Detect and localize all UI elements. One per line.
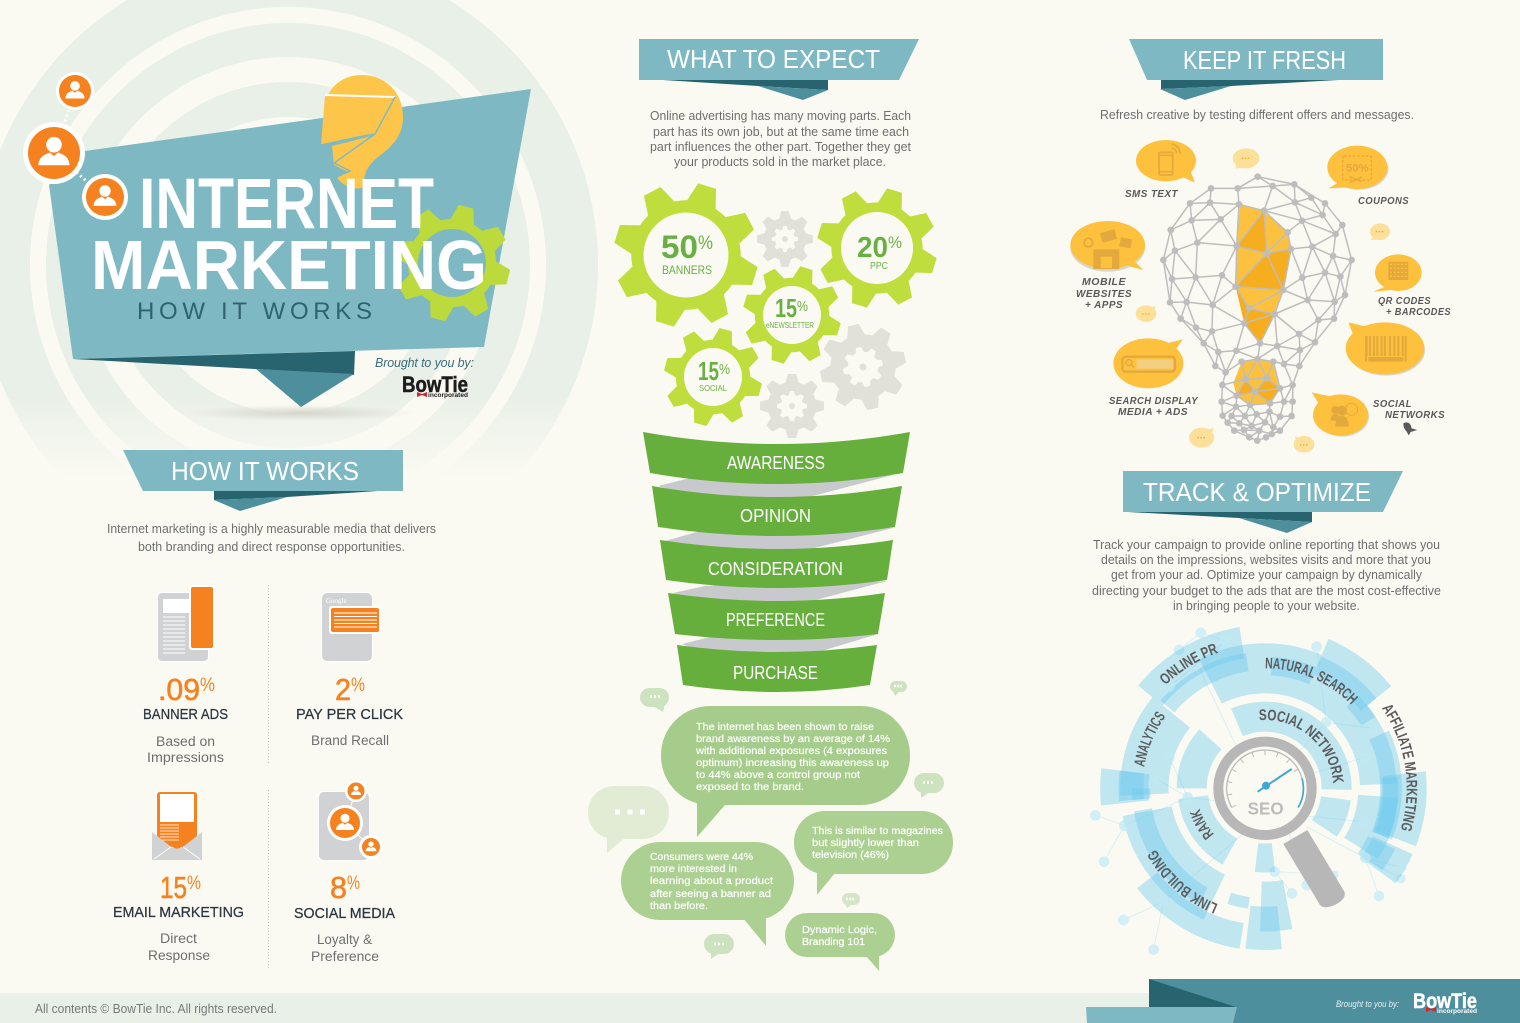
heading: keep it fresh: [1129, 39, 1383, 100]
stat: banner ads: %: [200, 675, 215, 696]
sponsor credit: BowTie: [402, 372, 468, 397]
stat: pay per click: Brand Recall: [311, 733, 389, 748]
gear: 20% ppc: PPC: [870, 261, 888, 272]
bubble: brand awareness: to 44% above a control group not: [696, 770, 860, 781]
bubble: brand awareness: optimum) increasing this awareness up: [696, 758, 889, 769]
keep it fresh labels: MEDIA + ADS: [1118, 406, 1188, 418]
bubble: source: Dynamic Logic,: [802, 925, 877, 936]
intro text: details on the impressions, websites visits and more that you: [1101, 553, 1431, 567]
funnel stage: opinion: [652, 486, 902, 536]
radial segments: [1058, 581, 1472, 996]
sponsor ribbon: [1086, 979, 1520, 1023]
background concentric rings: [0, 0, 620, 590]
seo radial diagram: [1090, 627, 1427, 955]
gear: 15% social: %: [719, 362, 730, 378]
icon: green gear: [382, 193, 522, 333]
footer: [0, 979, 1520, 1023]
bubble: brand awareness: brand awareness by an average of 14%: [696, 734, 890, 745]
funnel stage: opinion: OPINION: [740, 506, 811, 526]
heading: what to expect: [639, 39, 919, 100]
bubble: brand awareness: with additional exposures (4 exposures: [695, 746, 887, 757]
gear: 15% enewsletter: eNEWSLETTER: [766, 320, 814, 330]
bubble: search display: [1113, 338, 1183, 388]
segment labels: SOCIAL NETWORK: [1259, 709, 1344, 784]
bubble: consumers: [621, 842, 794, 946]
stat: social media: Loyalty &: [317, 932, 372, 947]
gear: 50% banners: 50: [661, 229, 698, 265]
intro text: get from your ad. Optimize your campaign by dynamically: [1111, 568, 1423, 582]
intro text: [650, 109, 912, 169]
bubble: social networks: [1312, 392, 1369, 437]
copyright: All contents © BowTie Inc. All rights reserved.: [35, 1001, 277, 1016]
funnel stage: awareness: AWARENESS: [727, 453, 825, 473]
heading: track and optimize: TRACK & OPTIMIZE: [1143, 477, 1371, 507]
segment labels: RANK: [1190, 808, 1214, 840]
intro text: part influences the other part. Together they get: [650, 140, 912, 154]
heading: keep it fresh: KEEP IT FRESH: [1183, 45, 1346, 75]
funnel stage: purchase: PURCHASE: [733, 663, 818, 683]
mesh nodes: [1163, 177, 1352, 441]
icon: envelope: [152, 791, 202, 860]
bubble: consumers: learning about a product: [650, 876, 773, 887]
stat: banner ads: Based on: [156, 734, 215, 749]
icon: magnifier with seo gauge: SEO: [1248, 798, 1284, 818]
sponsor ribbon: incorporated: [1437, 1009, 1477, 1015]
stat: social media: SOCIAL MEDIA: [294, 905, 395, 922]
panel: what to expect: [588, 39, 953, 971]
bubble: consumers: than before.: [650, 901, 708, 912]
funnel stage: consideration: CONSIDERATION: [708, 559, 843, 579]
stat: email marketing: EMAIL MARKETING: [113, 904, 244, 921]
keep it fresh labels: SEARCH DISPLAY: [1109, 395, 1198, 407]
bubble: brand awareness: exposed to the brand.: [696, 782, 804, 793]
heading: how it works: [123, 450, 403, 511]
bubble: magazines: [794, 811, 953, 895]
keep it fresh labels: [1076, 188, 1451, 421]
bubble: coupons: [1327, 146, 1388, 190]
funnel: [643, 432, 910, 692]
gear: 15% social: [653, 317, 773, 437]
network nodes over segments: [1119, 636, 1406, 907]
keep it fresh labels: SOCIAL: [1373, 398, 1412, 410]
stat: email marketing: %: [187, 873, 201, 894]
funnel stage: purchase: [677, 645, 877, 692]
sponsor credit: Brought to you by:: [375, 356, 474, 370]
title banner: [23, 72, 531, 421]
gear: 15% enewsletter: %: [797, 299, 808, 315]
stat: social media: %: [347, 873, 360, 894]
intro text: Track your campaign to provide online reporting that shows you: [1093, 538, 1440, 552]
stat: email marketing: [113, 791, 244, 963]
title text: INTERNET: [139, 165, 434, 244]
segment labels: ONLINE PR: [1160, 644, 1218, 684]
segment labels: NATURAL SEARCH: [1266, 658, 1358, 704]
segment labels: AFFILIATE MARKETING: [1382, 704, 1418, 831]
bubble: qr codes: [1373, 254, 1422, 292]
stat: banner ads: BANNER ADS: [143, 706, 228, 723]
gear: 15% enewsletter: 15: [775, 293, 797, 323]
intro text: [1092, 538, 1441, 613]
bubble: consumers: Consumers were 44%: [650, 852, 753, 863]
intro text: Internet marketing is a highly measurable media that delivers: [107, 522, 436, 536]
heading: what to expect: WHAT TO EXPECT: [667, 44, 880, 74]
icon: banner ad: [157, 585, 215, 662]
light bulb network: [1070, 140, 1425, 453]
stat: email marketing: Response: [148, 948, 210, 963]
gear: 15% enewsletter: [731, 254, 853, 376]
heading: track and optimize: [1123, 471, 1403, 533]
stat: banner ads: .09: [158, 672, 200, 707]
stat: pay per click: [296, 592, 403, 748]
intro text: in bringing people to your website.: [1173, 599, 1360, 613]
funnel stage: preference: PREFERENCE: [726, 610, 825, 630]
icon: social network: [318, 780, 383, 861]
stat: banner ads: Impressions: [147, 750, 224, 765]
gear: 20% ppc: 20: [857, 232, 888, 264]
keep it fresh labels: SMS TEXT: [1125, 188, 1179, 200]
keep it fresh labels: NETWORKS: [1385, 409, 1445, 421]
speech bubbles: [588, 681, 953, 971]
title text: HOW IT WORKS: [137, 298, 372, 325]
funnel stage: consideration: [660, 540, 893, 588]
stat: social media: 8: [330, 870, 347, 905]
gear: 15% social: SOCIAL: [699, 383, 727, 393]
segment labels: ANALYTICS: [1134, 712, 1165, 767]
title text: MARKETING: [91, 226, 487, 304]
gear: 50% banners: %: [698, 233, 713, 254]
bubble: source: Branding 101: [802, 937, 865, 948]
gear: 20% ppc: %: [888, 233, 902, 252]
gear: 20% ppc: [802, 173, 952, 323]
stat: pay per click: PAY PER CLICK: [296, 706, 403, 723]
stat: pay per click: 2: [335, 672, 351, 707]
bulb filament facets: [1233, 205, 1291, 405]
segment labels: LINK BUILDING: [1148, 850, 1218, 914]
stat: pay per click: %: [351, 675, 365, 696]
bubble: mobile: [1070, 221, 1145, 272]
bubble: brand awareness: [661, 706, 910, 837]
title text: [91, 165, 487, 325]
funnel stage: awareness: [643, 432, 910, 484]
icon: search ad: [321, 592, 381, 662]
intro text: directing your budget to the ads that are the most cost-effective: [1092, 584, 1441, 598]
gear: 50% banners: [596, 165, 776, 345]
stat: banner ads: [143, 585, 228, 765]
icon: bird: [1403, 422, 1417, 435]
intro text: [107, 522, 436, 554]
bubble: magazines: This is similar to magazines: [812, 826, 943, 837]
stat: email marketing: Direct: [160, 931, 197, 946]
panel: how it works: [107, 450, 436, 968]
decorative chat bubbles: [588, 681, 944, 959]
stat: social media: Preference: [311, 949, 379, 964]
intro text: Refresh creative by testing different offers and messages.: [1100, 108, 1414, 122]
keep it fresh labels: + APPS: [1085, 299, 1123, 311]
gear: idle small top: [757, 211, 813, 267]
icon: connected people: [23, 72, 128, 220]
sponsor ribbon: Brought to you by:: [1336, 999, 1399, 1009]
icon: magnifier with seo gauge: [1213, 736, 1345, 907]
bubble: brand awareness: The internet has been shown to raise: [696, 722, 874, 733]
gear: 50% banners: BANNERS: [662, 263, 712, 277]
chat bubble small pale set: [1136, 148, 1390, 453]
keep it fresh labels: WEBSITES: [1076, 288, 1132, 300]
sponsor credit: incorporated: [428, 393, 468, 399]
funnel stage: preference: [668, 593, 885, 640]
segment labels: [1134, 644, 1418, 914]
intro text: your products sold in the market place.: [674, 155, 886, 169]
gear: 15% social: 15: [698, 356, 719, 386]
stat: social media: [294, 780, 395, 964]
heading: how it works: HOW IT WORKS: [171, 456, 359, 486]
bubble: consumers: more interested in: [650, 864, 737, 875]
panel: keep it fresh: [1070, 39, 1451, 453]
stat: email marketing: 15: [160, 870, 187, 905]
panel: track and optimize: [1090, 471, 1441, 955]
icon: search ad: Google: [326, 597, 347, 605]
gears: media mix: [596, 165, 952, 438]
bubble: coupons: 50%: [1346, 163, 1369, 175]
intro text: part has its own job, but at the same time each: [653, 125, 909, 139]
bubble: barcodes: [1346, 322, 1425, 376]
sponsor ribbon: BowTie: [1413, 990, 1477, 1013]
icon: light bulb: [321, 75, 403, 189]
intro text: both branding and direct response opportunities.: [138, 540, 405, 554]
intro text: Online advertising has many moving parts. Each: [650, 109, 911, 123]
keep it fresh labels: QR CODES: [1378, 295, 1431, 307]
bubble: consumers: after seeing a banner ad: [650, 889, 771, 900]
gear: idle small bottom: [760, 374, 824, 438]
network lines and nodes: [1090, 627, 1406, 955]
bubble: magazines: but slightly lower than: [812, 838, 919, 849]
mesh lines: [1163, 177, 1352, 441]
bubble: sms text: [1136, 140, 1196, 183]
gear: idle large: [811, 315, 915, 419]
sponsor credit: [375, 356, 474, 399]
bubble: source: [785, 913, 895, 971]
keep it fresh labels: MOBILE: [1082, 276, 1126, 288]
keep it fresh labels: COUPONS: [1358, 195, 1409, 207]
bubble: magazines: television (46%): [812, 850, 889, 861]
keep it fresh labels: + BARCODES: [1386, 306, 1451, 318]
